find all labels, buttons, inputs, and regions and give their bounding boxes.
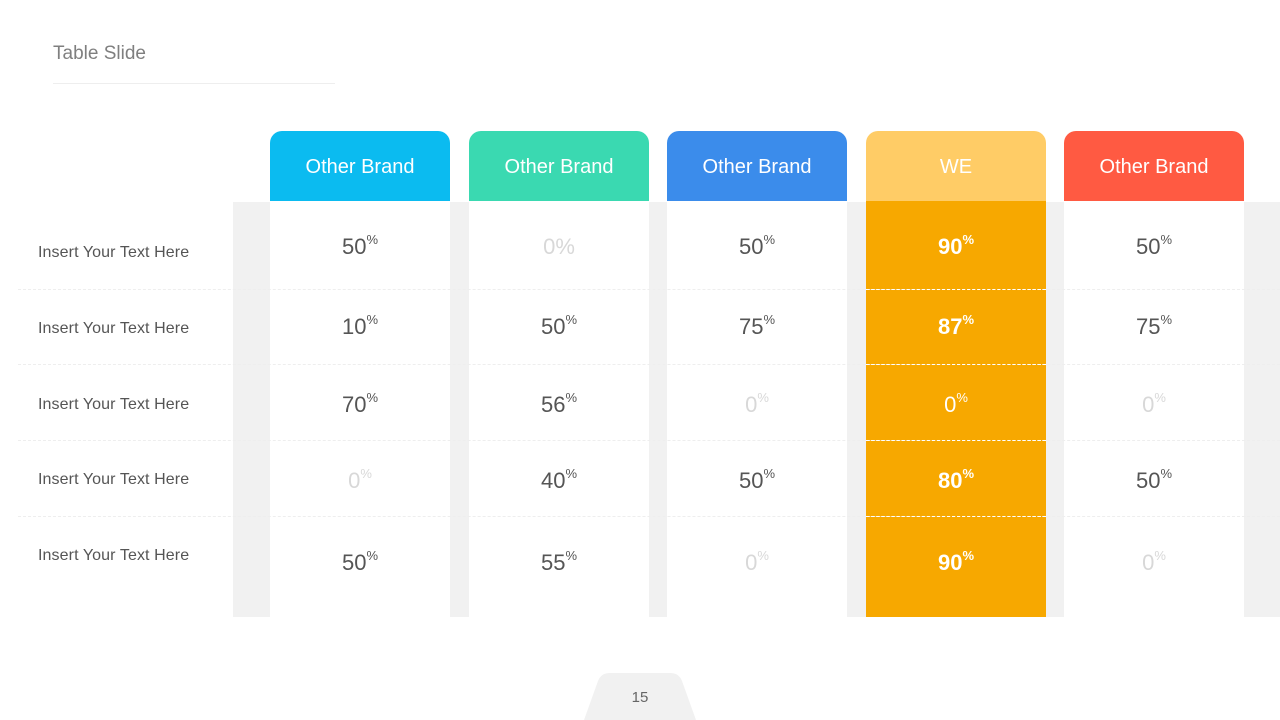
row labels: Insert Your Text Here <box>38 244 189 261</box>
values: brand 2: 55% <box>541 548 577 575</box>
column: WE <box>866 201 1046 617</box>
header: brand 3 <box>667 131 847 201</box>
values: brand 2: 50% <box>541 312 577 339</box>
page number tab: 15 <box>632 689 648 706</box>
row labels: Insert Your Text Here <box>38 471 189 488</box>
values: brand 3: 50% <box>739 466 775 493</box>
values: brand 3: 0% <box>745 548 769 575</box>
header: WE <box>866 131 1046 201</box>
values: brand 3: 50% <box>739 232 775 259</box>
row labels: Insert Your Text Here <box>38 320 189 337</box>
values: brand 5: 50% <box>1136 466 1172 493</box>
column: brand 5 <box>1064 201 1244 617</box>
values: brand 5: 0% <box>1142 390 1166 417</box>
header: brand 5 <box>1064 131 1244 201</box>
values: brand 2 <box>541 234 577 575</box>
page number tab <box>584 673 696 720</box>
values: brand 5: 0% <box>1142 548 1166 575</box>
header: brand 1 <box>270 131 450 201</box>
row labels <box>38 244 189 564</box>
values: brand 1: 10% <box>342 312 378 339</box>
column: brand 2 <box>469 201 649 617</box>
values: brand 2: 40% <box>541 466 577 493</box>
values: WE: 0% <box>944 390 968 417</box>
header: WE: WE <box>940 156 972 178</box>
header: brand 1: Other Brand <box>306 156 414 178</box>
header: brand 5: Other Brand <box>1100 156 1208 178</box>
title: Table Slide <box>53 43 146 64</box>
values: brand 1: 50% <box>342 548 378 575</box>
values: brand 5: 50% <box>1136 232 1172 259</box>
header: brand 2: Other Brand <box>505 156 613 178</box>
values: WE: 87% <box>938 312 974 339</box>
values: WE: 90% <box>938 548 974 575</box>
header: brand 3: Other Brand <box>703 156 811 178</box>
values: brand 3 <box>739 232 775 575</box>
values: WE <box>938 232 974 575</box>
values: WE: 90% <box>938 232 974 259</box>
values: brand 1 <box>342 232 378 575</box>
values: brand 1: 0% <box>348 466 372 493</box>
values: brand 1: 50% <box>342 232 378 259</box>
table background <box>233 202 1280 617</box>
header: brand 2 <box>469 131 649 201</box>
values: WE: 80% <box>938 466 974 493</box>
values: brand 1: 70% <box>342 390 378 417</box>
row labels: Insert Your Text Here <box>38 547 189 564</box>
column: brand 3 <box>667 201 847 617</box>
values: brand 2: 0% <box>543 234 575 259</box>
row labels: Insert Your Text Here <box>38 396 189 413</box>
values: brand 5 <box>1136 232 1172 575</box>
values: brand 2: 56% <box>541 390 577 417</box>
values: brand 3: 75% <box>739 312 775 339</box>
values: brand 5: 75% <box>1136 312 1172 339</box>
values: brand 3: 0% <box>745 390 769 417</box>
column: brand 1 <box>270 201 450 617</box>
